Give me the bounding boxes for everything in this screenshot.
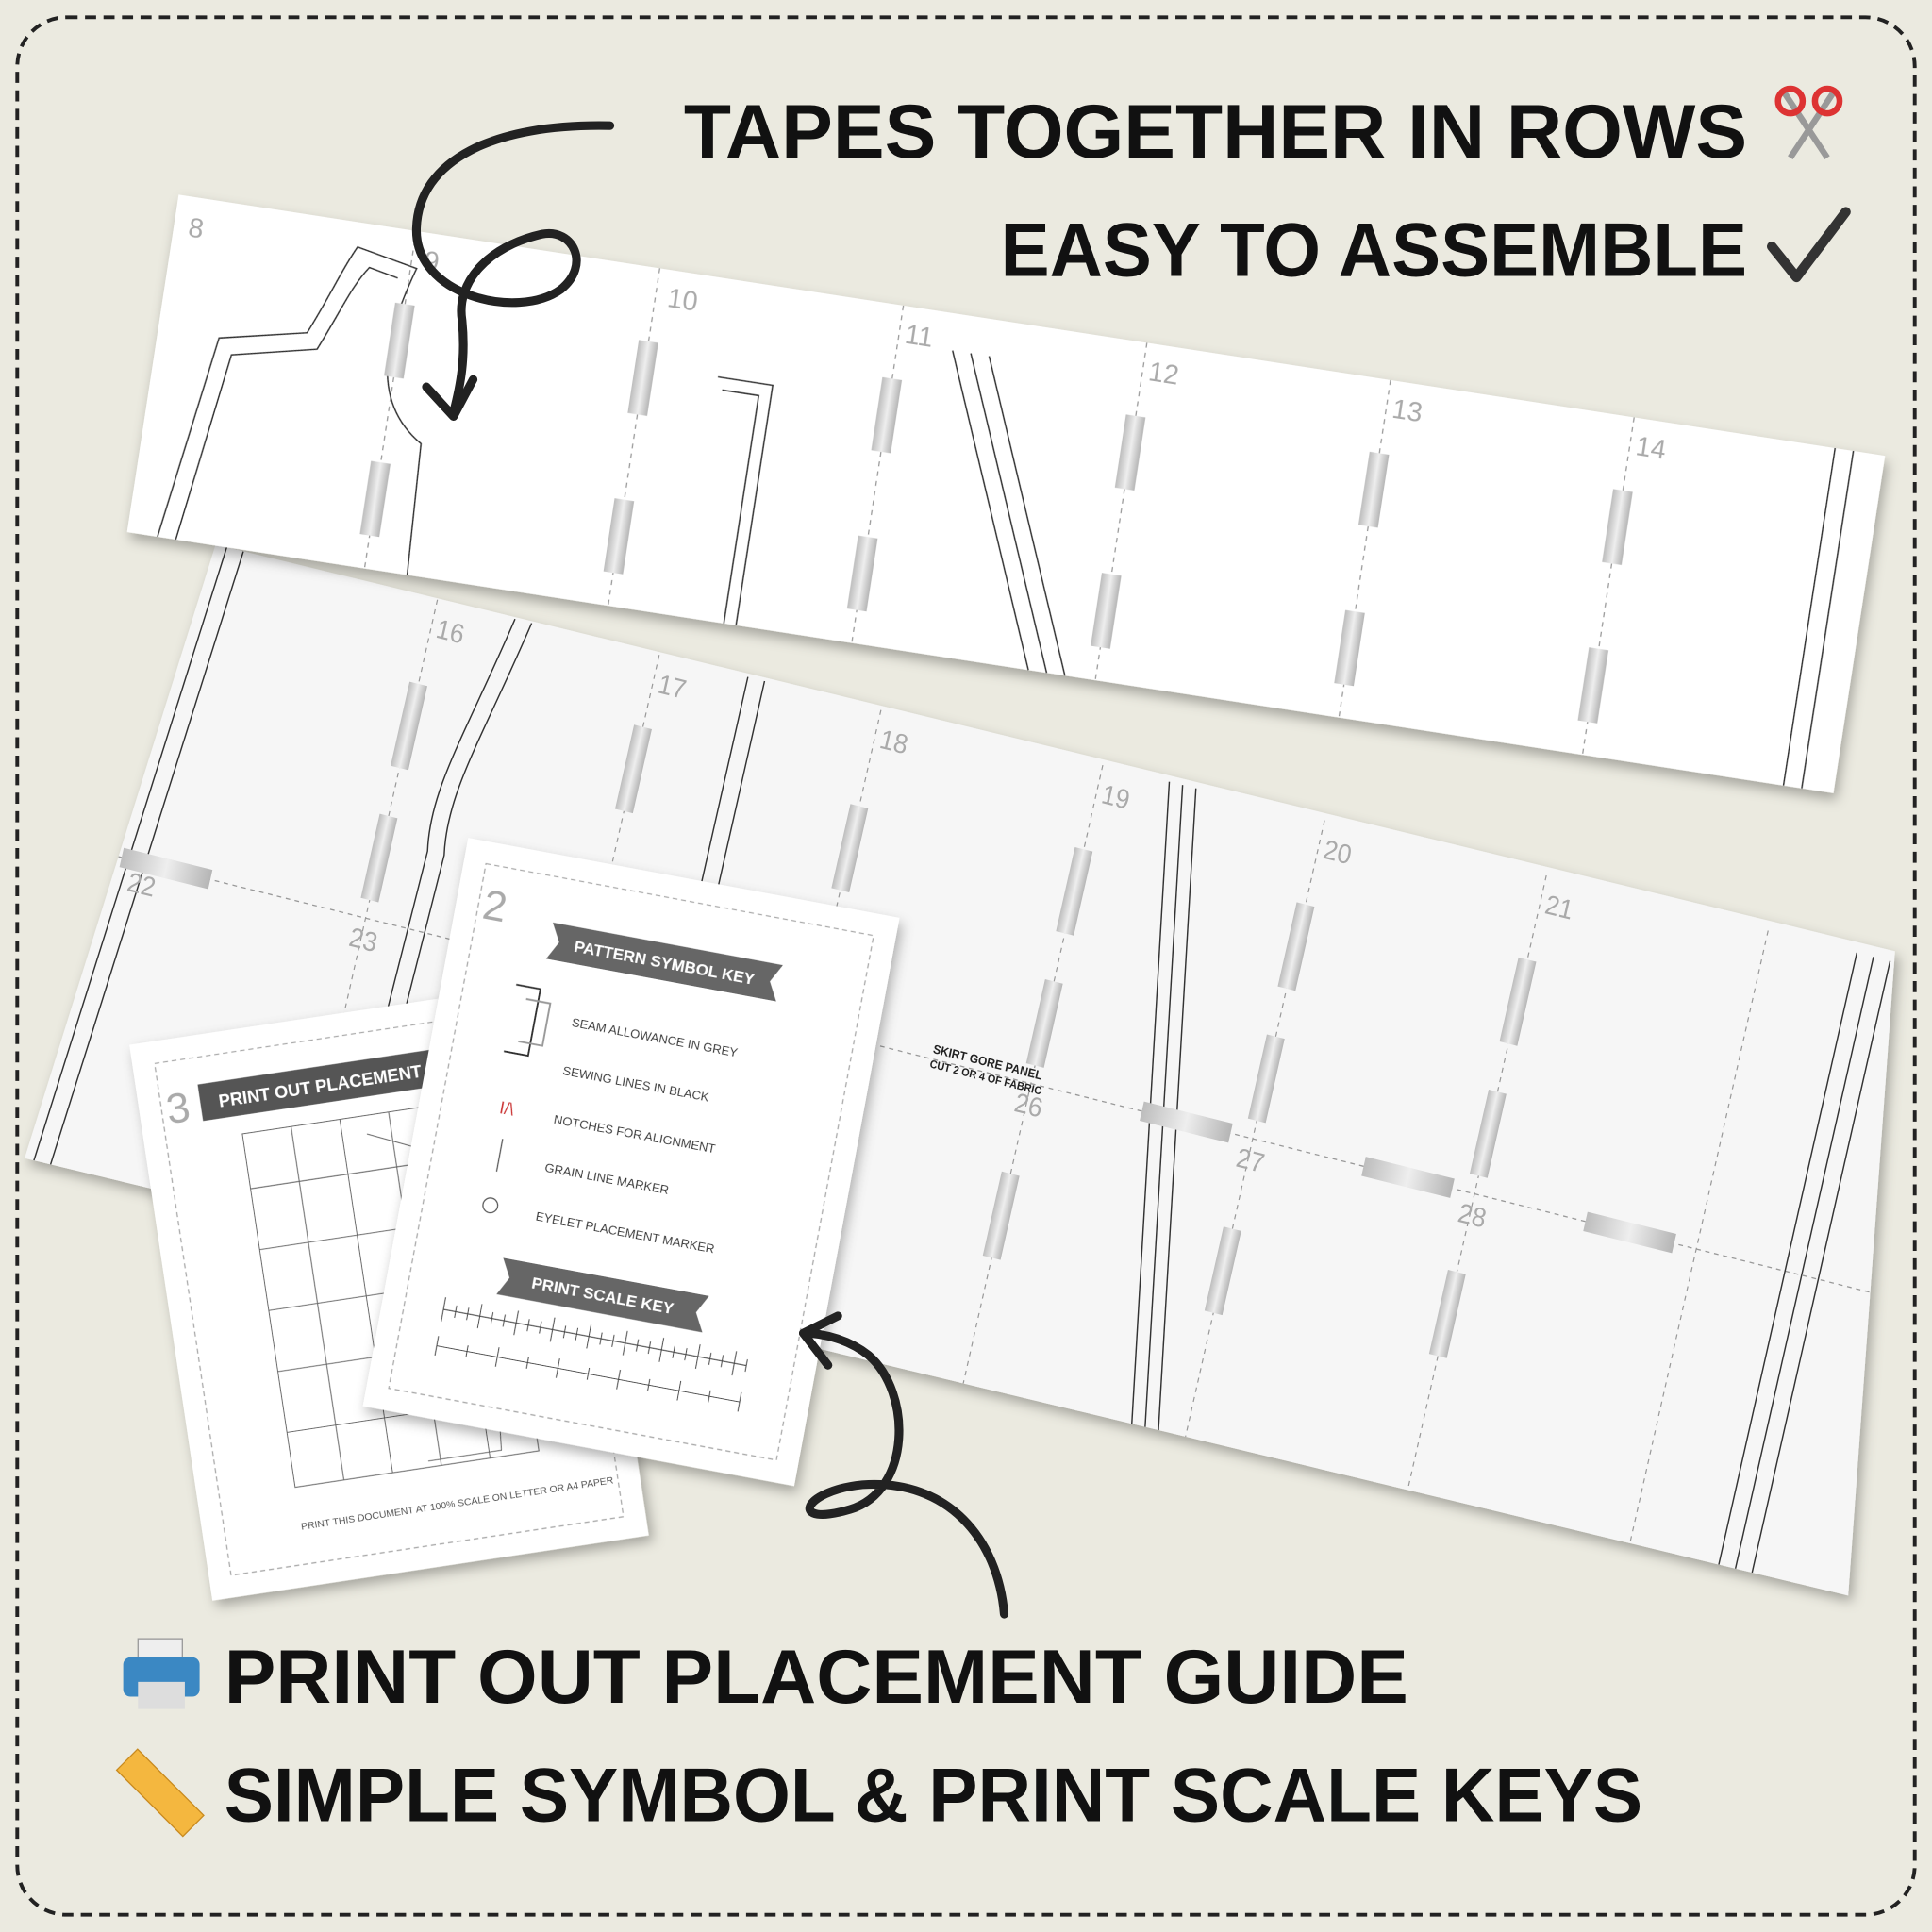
banner: pattern symbol key bbox=[546, 923, 783, 1002]
heading: tapes together in rows: TAPES TOGETHER IN ROWS bbox=[684, 90, 1747, 175]
panel: page 2 symbol key: SEAM ALLOWANCE IN GREY bbox=[571, 1015, 740, 1059]
text: print out placement guide: PRINT OUT PLACEMENT GUIDE bbox=[225, 1635, 1408, 1720]
banner: pattern symbol key: PATTERN SYMBOL KEY bbox=[573, 938, 757, 989]
panel: lower pattern strip: SKIRT GORE PANEL bbox=[932, 1042, 1044, 1083]
panel: upper pattern strip: 11 bbox=[903, 320, 935, 354]
banner: print out placement: PRINT OUT PLACEMENT bbox=[217, 1061, 423, 1111]
panel: upper pattern strip: 8 bbox=[186, 212, 206, 244]
panel: page 2 symbol key bbox=[363, 838, 900, 1486]
panel: page 2 symbol key: EYELET PLACEMENT MARKER bbox=[535, 1208, 716, 1256]
panel: lower pattern strip: 26 bbox=[1012, 1087, 1045, 1124]
text: simple symbol & print scale keys: SIMPLE SYMBOL & PRINT SCALE KEYS bbox=[225, 1753, 1642, 1838]
panel: lower pattern strip: 22 bbox=[125, 866, 158, 903]
panel: lower pattern strip: 21 bbox=[1542, 889, 1576, 925]
panel: upper pattern strip: 14 bbox=[1634, 431, 1668, 466]
icon: printer bbox=[124, 1639, 200, 1709]
panel: page 2 symbol key: NOTCHES FOR ALIGNMENT bbox=[553, 1112, 717, 1156]
ruler bbox=[435, 1297, 749, 1411]
panel: upper pattern strip: 12 bbox=[1146, 357, 1181, 391]
panel: upper pattern strip: 10 bbox=[665, 283, 700, 318]
banner: print scale key: PRINT SCALE KEY bbox=[530, 1274, 675, 1318]
banner: print scale key bbox=[496, 1257, 709, 1332]
arrow: top curly arrow bbox=[416, 125, 610, 416]
panel: page 3 placement guide: 3 bbox=[163, 1084, 193, 1133]
panel: lower pattern strip: 28 bbox=[1456, 1197, 1490, 1234]
icon: scissors bbox=[1778, 89, 1840, 158]
panel: page 3 placement guide bbox=[129, 979, 649, 1601]
panel: lower pattern strip bbox=[25, 545, 1905, 1607]
panel: lower pattern strip: 19 bbox=[1099, 779, 1133, 815]
panel: upper pattern strip: 13 bbox=[1390, 394, 1424, 428]
heading: easy to assemble: EASY TO ASSEMBLE bbox=[1001, 208, 1747, 293]
panel: upper pattern strip bbox=[127, 194, 1885, 793]
panel: page 2 symbol key: I/\ bbox=[498, 1097, 517, 1120]
banner: print out placement bbox=[197, 1044, 471, 1121]
icon: checkmark bbox=[1772, 212, 1846, 277]
panel: lower pattern strip: CUT 2 OR 4 OF FABRIC bbox=[928, 1058, 1042, 1098]
panel: page 2 symbol key: 2 bbox=[479, 882, 510, 931]
panel: page 3 placement guide: PRINT THIS DOCUMENT AT 100% SCALE ON LETTER OR A4 PAPER bbox=[300, 1475, 615, 1533]
panel: page 2 symbol key: GRAIN LINE MARKER bbox=[543, 1160, 670, 1197]
panel: lower pattern strip: 23 bbox=[346, 922, 380, 958]
panel: page 2 symbol key: SEWING LINES IN BLACK bbox=[561, 1063, 710, 1105]
panel: lower pattern strip: 17 bbox=[656, 669, 690, 705]
panel: lower pattern strip: 20 bbox=[1321, 834, 1355, 871]
panel: lower pattern strip: 16 bbox=[434, 613, 467, 650]
panel: lower pattern strip: 18 bbox=[877, 724, 911, 760]
icon: ruler bbox=[117, 1749, 204, 1837]
panel: lower pattern strip: 27 bbox=[1234, 1142, 1267, 1178]
panel: upper pattern strip: 9 bbox=[422, 246, 441, 278]
arrow: bottom curly arrow bbox=[804, 1316, 1004, 1614]
